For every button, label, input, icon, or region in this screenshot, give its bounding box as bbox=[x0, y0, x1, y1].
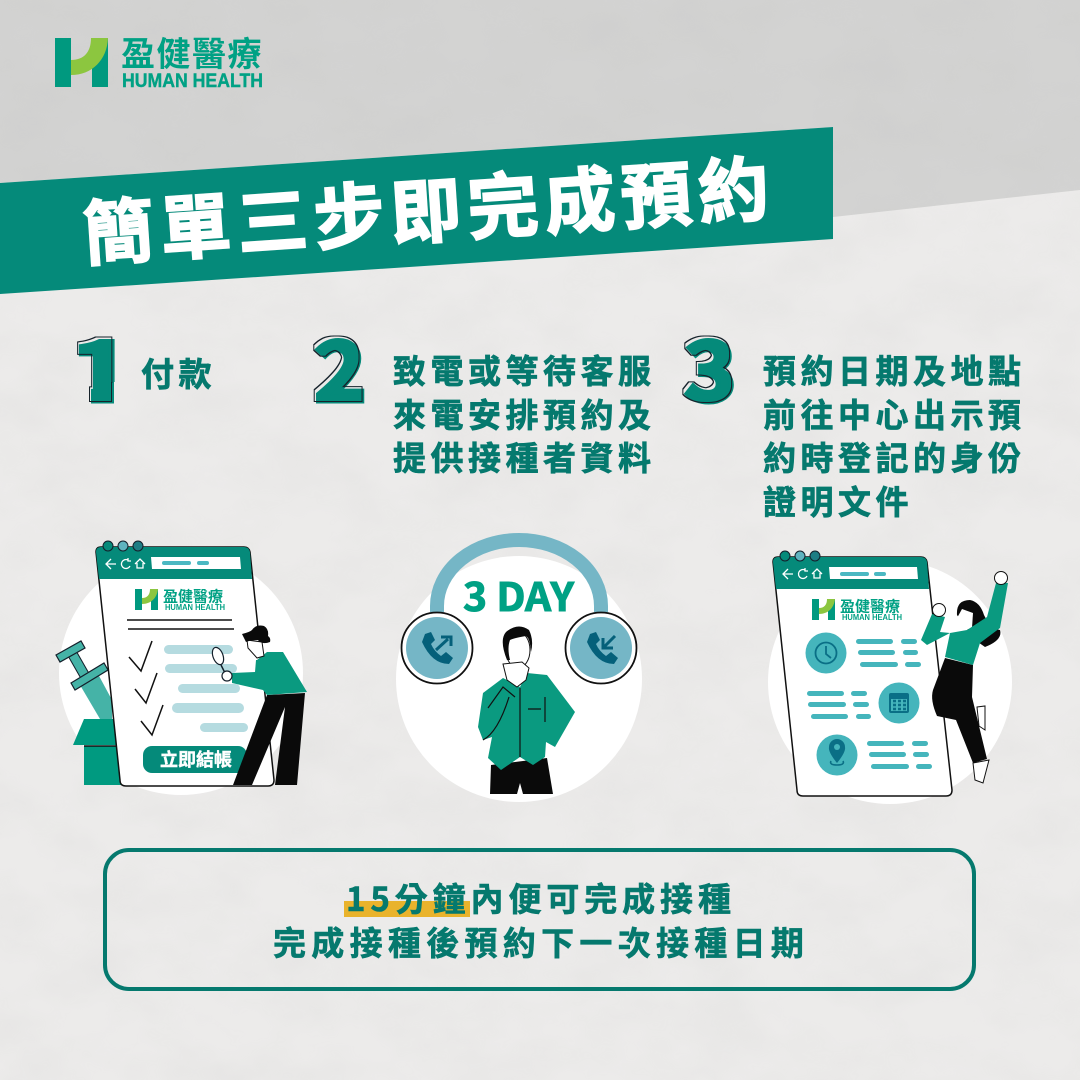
step 3 number: 3 bbox=[683, 306, 734, 422]
step 1 number bbox=[77, 336, 115, 404]
icon: incoming call bbox=[566, 612, 636, 684]
callout: bottom note: 完成接種後預約下一次接種日期 bbox=[273, 917, 809, 965]
step 2 text: 來電安排預約及 bbox=[393, 389, 656, 437]
mini logo: 盈健醫療 bbox=[840, 596, 900, 616]
step 1 text: 付款 bbox=[141, 348, 216, 396]
title banner: 簡單三步即完成預約 bbox=[80, 133, 778, 281]
step 3 text: 預約日期及地點 bbox=[763, 345, 1026, 393]
cheering woman bbox=[921, 572, 1008, 783]
label: 3 DAY: 3 DAY bbox=[463, 567, 574, 623]
logo: Human Health: HUMAN HEALTH bbox=[122, 70, 263, 92]
step 2 text: 致電或等待客服 bbox=[393, 345, 656, 393]
mini logo bbox=[135, 586, 225, 612]
mini logo: 盈健醫療 bbox=[163, 586, 223, 606]
checkout button: 立即結帳 bbox=[160, 746, 232, 772]
thinking man bbox=[478, 626, 575, 794]
icon: syringes in box bbox=[56, 641, 124, 785]
mini logo bbox=[812, 596, 902, 622]
step 2 text bbox=[393, 345, 656, 480]
checklist bbox=[127, 620, 248, 735]
icon: calendar bbox=[878, 682, 920, 724]
step 2 number: 2 bbox=[313, 306, 364, 422]
step 3 text bbox=[763, 345, 1026, 524]
step 3 text: 前往中心出示預 bbox=[763, 389, 1026, 437]
step 1 number: 1 bbox=[71, 308, 132, 424]
highlight bbox=[344, 901, 470, 917]
checkout button bbox=[143, 746, 247, 773]
text pills bbox=[807, 639, 932, 769]
step 1 number: 1 bbox=[69, 306, 130, 422]
step 2 number: 2 bbox=[315, 308, 366, 424]
step 3 text: 約時登記的身份 bbox=[763, 432, 1026, 480]
step 3 number: 3 bbox=[685, 308, 736, 424]
man with magnifier bbox=[210, 626, 307, 785]
mini logo: HUMAN HEALTH bbox=[842, 613, 902, 622]
browser window bbox=[96, 541, 274, 786]
illustration: step 2 phone call bbox=[396, 540, 642, 802]
icon: map pin bbox=[816, 734, 858, 776]
callout: bottom note bbox=[105, 850, 974, 989]
browser window bbox=[773, 551, 952, 796]
logo: Human Health bbox=[55, 27, 263, 92]
illustration: step 1 checkout page bbox=[56, 541, 307, 795]
arc headset bbox=[437, 540, 601, 612]
step 2 text: 提供接種者資料 bbox=[393, 432, 656, 480]
icon: outgoing call bbox=[402, 612, 472, 684]
callout: bottom note: 15分鐘內便可完成接種 bbox=[346, 873, 736, 921]
logo: Human Health: 盈健醫療 bbox=[121, 27, 263, 76]
illustration: step 3 appointment page bbox=[768, 551, 1012, 804]
icon: clock bbox=[806, 632, 846, 674]
step 3 text: 證明文件 bbox=[763, 476, 913, 524]
mini logo: HUMAN HEALTH bbox=[165, 603, 225, 612]
